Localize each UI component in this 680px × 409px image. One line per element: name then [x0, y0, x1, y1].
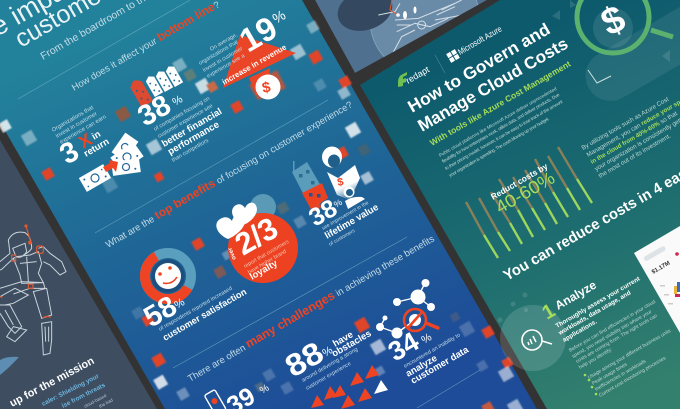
- icon: hearts and badge: [216, 194, 298, 283]
- chart: cost reduction bars: [466, 147, 592, 258]
- text: 38 percent lifetime value: [304, 194, 381, 248]
- icon: orange up arrow: $: [261, 79, 273, 97]
- icon: magnifier with dollar: [577, 0, 673, 53]
- text: analyze step: Before you can find efficiencies in your cloud: [568, 299, 657, 354]
- subtitle: Azure Cost Management: With tools like Azure Cost Management: [428, 59, 573, 148]
- text: 19 percent: organizations that: [198, 39, 240, 67]
- text: mission subhead: ise from threats: [61, 382, 107, 409]
- icon: astronaut outline: [0, 232, 66, 355]
- icon: phone: [204, 389, 226, 409]
- text: 38 percent lifetime value: %: [332, 197, 344, 210]
- text: 88 percent obstacles: have: [331, 329, 355, 350]
- list: bullets: Inefficiencies in workloads: [594, 358, 648, 393]
- icon: decorative triangles: [552, 0, 670, 62]
- text: 3x in return: in: [90, 129, 103, 143]
- text: two thirds loyalty: 2/3: [229, 210, 284, 262]
- chart: satisfaction donut: [137, 245, 199, 307]
- icon: building with person: $: [336, 176, 345, 189]
- logo: Microsoft Azure: [446, 23, 504, 63]
- text: 19 percent: experience see a: [206, 53, 247, 80]
- decorative squares: [0, 20, 523, 409]
- icon: buildings row: [128, 64, 183, 108]
- text: mission subhead: the bad: [98, 397, 114, 409]
- icon: molecule with magnifier: [376, 279, 438, 338]
- text: 88 percent obstacles: around delivering a strong: [301, 347, 359, 384]
- heading: many challenges: There are often many challenges in achieving these benefits: [184, 231, 437, 385]
- icon: orange pin: [390, 0, 416, 19]
- text: 58 percent: 58: [138, 290, 182, 334]
- text: 3x in return: invest in customer: [55, 111, 99, 140]
- text: 34 percent: analyze: [404, 353, 439, 380]
- text: analyze step: workloads, data usage, and: [557, 289, 632, 337]
- text: 34 percent: %: [420, 331, 434, 347]
- panel: dashboard card: $1.17M: [651, 261, 671, 276]
- text: 34 percent: customer data: [409, 344, 471, 387]
- logo: Microsoft Azure: Microsoft Azure: [456, 23, 504, 57]
- text: 34 percent: encountered an inability to: [403, 332, 462, 370]
- icon: building with person: [292, 146, 365, 209]
- text: 38 percent financial performance: of companies focusing on: [153, 96, 211, 133]
- text: analyze step: Analyze: [552, 278, 599, 313]
- panel: left astronaut: [0, 140, 157, 409]
- text: mission subhead: cloud-based: [83, 393, 108, 409]
- heading: bottom line: How does it affect your bottom line?: [68, 0, 222, 94]
- text: 38 percent lifetime value: of customers: [328, 228, 357, 248]
- text: intro body: Public cloud platforms like Microsoft Azure deliver unprecedented: [438, 86, 558, 158]
- icon: orange up arrow: [223, 35, 296, 100]
- text: intro body: to their pricing model, however, it can be easy to lose track of the amount: [444, 99, 564, 171]
- text: 38 percent lifetime value: see improvement in the: [321, 200, 370, 232]
- panel: teal cloud costs: [360, 0, 680, 409]
- text: 19 percent: invest in customer: [202, 46, 244, 74]
- text: 38 percent lifetime value: 38: [304, 194, 342, 232]
- text: 3x in return: Organizations that: [51, 105, 95, 134]
- text: 19 percent: increase in revenue: [220, 42, 289, 87]
- panel: blue customer experience: [0, 0, 537, 409]
- text: right body: the most out of its investment.: [598, 132, 672, 180]
- title: govern and manage: Manage Cloud Costs: [414, 34, 571, 135]
- icon: chevron: [588, 70, 611, 83]
- text: 3x in return: return: [82, 136, 111, 160]
- text: 3x in return: experience can earn: [59, 114, 107, 146]
- text: two thirds loyalty: loyalty: [248, 258, 280, 283]
- icon: money bills with arrow: [79, 133, 144, 192]
- text: 3x in return: [51, 105, 111, 171]
- text: 58 percent: %: [172, 296, 187, 312]
- list: bullets: Usage among your different business units: [587, 328, 672, 381]
- text: 3x in return: 3: [54, 135, 84, 171]
- text: 38 percent financial performance: %: [170, 93, 185, 109]
- text: 38 percent financial performance: customer experience see: [157, 103, 214, 140]
- text: intro body: your organization is spending. The costs blowing up your budget.: [448, 116, 550, 178]
- text: right body: By utilizing tools such as Azure Cost: [580, 96, 670, 152]
- text: 88 percent obstacles: 88: [279, 335, 329, 384]
- text: 19 percent: %: [270, 7, 288, 27]
- text: two thirds loyalty: have higher brand: [247, 249, 288, 276]
- logo: redapt: redapt: [404, 64, 432, 86]
- text: two thirds loyalty: [227, 210, 290, 283]
- text: analyze step: help you identify:: [578, 347, 614, 371]
- text: two thirds loyalty: report that customers: [243, 239, 290, 270]
- text: 39 percent: %: [258, 383, 271, 397]
- list: bullets: Current cost-monitoring processes: [598, 355, 668, 399]
- text: 38 percent financial performance: [132, 89, 224, 164]
- text: 88 percent obstacles: %: [320, 344, 335, 360]
- text: mission subhead: caler: Shielding your: [41, 373, 101, 408]
- text: 88 percent obstacles: obstacles: [330, 328, 373, 360]
- text: two thirds loyalty: over: [227, 246, 238, 260]
- text: reduce costs by: Reduct costs by: [489, 161, 550, 202]
- text: analyze step: costs are coming from. The right tools can: [575, 313, 659, 365]
- text: 34 percent: 34: [383, 326, 424, 367]
- text: analyze step: [538, 275, 659, 371]
- icon: wireframe: [378, 0, 462, 52]
- text: analyze step: Thoroughly assess your current: [554, 275, 642, 330]
- text: 19 percent: On average,: [209, 32, 239, 53]
- text: analyze step: applications.: [562, 318, 599, 344]
- icon: analyze circle: [498, 292, 566, 371]
- text: 58 percent: of respondents reported increased: [158, 286, 234, 333]
- icon: warning cones: [311, 365, 388, 409]
- text: intro body: flexibility for how enterprises work, utilize data, and deliver products. Due: [441, 92, 561, 164]
- heading: mission: up for the mission: [8, 355, 97, 409]
- text: 88 percent obstacles: customer experience: [305, 361, 352, 392]
- shape: blue leaf: [0, 357, 19, 375]
- text: 38 percent financial performance: than competitors: [171, 138, 210, 164]
- text: 38 percent financial performance: 38: [132, 89, 176, 133]
- shape: dark ellipse: [338, 0, 392, 31]
- panel: dashboard card: [634, 226, 680, 333]
- text: 19 percent: 19: [233, 9, 283, 59]
- text: 38 percent financial performance: performance: [166, 119, 221, 158]
- shape: lighter pill: [576, 0, 680, 110]
- text: 38 percent lifetime value: lifetime value: [323, 202, 381, 242]
- text: analyze step: 1: [538, 300, 559, 324]
- list: bullets: Peak usage times: [591, 361, 629, 387]
- panel: top right slate: [315, 0, 487, 75]
- text: right body: in the cloud from 40%-60% so that: [590, 110, 679, 166]
- shape: globe: [370, 0, 478, 57]
- heading: top benefits: What are the top benefits of focusing on customer experience?: [102, 97, 355, 251]
- text: 88 percent obstacles: [279, 328, 373, 392]
- text: analyze step: spend, you need visibility into where your: [571, 309, 653, 360]
- icon: astronaut accents: [0, 225, 51, 318]
- text: reduce costs by: 40-60%: [492, 168, 558, 217]
- title: govern and manage: How to Govern and: [404, 20, 553, 116]
- text: 19 percent: [198, 7, 289, 87]
- text: 34 percent: [383, 326, 471, 387]
- text: 58 percent: customer satisfaction: [161, 286, 249, 343]
- text: 38 percent financial performance: better financial: [160, 106, 224, 150]
- text: 3x in return: X: [75, 129, 95, 152]
